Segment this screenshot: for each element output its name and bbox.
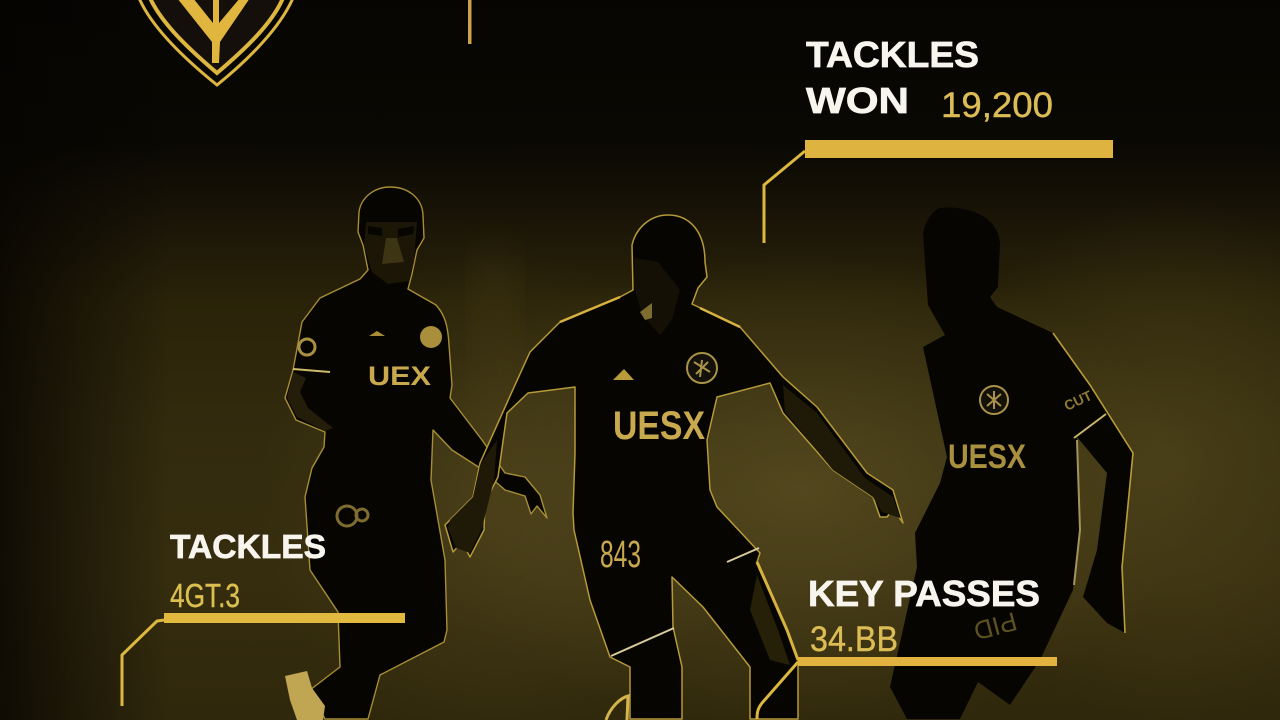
player: right footballer — [890, 207, 1133, 719]
inner arm rim: right player — [1074, 440, 1080, 585]
player: centre footballer — [445, 215, 903, 720]
label: tackles won: WON — [806, 80, 909, 121]
bar: tackles — [164, 613, 405, 623]
connector stub: top centre — [468, 0, 472, 44]
silhouette: right player — [890, 207, 1133, 719]
stat: tackles won — [764, 34, 1113, 243]
label: tackles won: TACKLES — [806, 34, 979, 75]
sleeve trim: right player — [1074, 414, 1106, 438]
shorts trim: centre player — [611, 548, 759, 656]
forearm: centre player right — [783, 385, 900, 518]
sleeve text: right player: CUT — [1062, 387, 1095, 414]
crest: right player — [980, 386, 1008, 414]
connector: tackles won — [764, 151, 805, 243]
boot trim: centre player — [606, 696, 628, 720]
shield emblem — [177, 0, 250, 63]
sleeve trim: left player — [293, 369, 330, 372]
sponsor: left player: UEX — [368, 361, 431, 391]
shorts number: right player: PID — [971, 606, 1020, 646]
shoulder highlight: centre player — [560, 297, 740, 327]
logo: gold shield crest — [139, 0, 293, 85]
value: 19,200: 19,200 — [941, 86, 1053, 125]
forearm: left player — [287, 372, 333, 431]
arm badge: left player — [299, 339, 315, 355]
bar: key passes — [798, 657, 1057, 666]
shirt mark: centre player — [613, 369, 634, 380]
sponsor: right player: UESX — [948, 438, 1026, 476]
crest: centre player — [687, 353, 717, 383]
label: key passes: KEY PASSES — [808, 573, 1040, 614]
bar: tackles won — [805, 140, 1113, 158]
player: left footballer — [285, 187, 547, 720]
boot: left player — [285, 671, 325, 720]
value: 34.BB: 34.BB — [810, 620, 898, 659]
rim light: right player — [1053, 333, 1133, 633]
shirt mark: left player — [369, 331, 385, 336]
crest: left player — [420, 326, 442, 348]
thigh rim: centre player — [757, 562, 798, 660]
sponsor: centre player: UESX — [613, 404, 705, 448]
forearm: centre player — [448, 440, 497, 553]
value: 4GT.3: 4GT.3 — [170, 577, 240, 614]
shorts number: centre player: 843 — [600, 534, 641, 576]
stat: key passes — [757, 573, 1057, 719]
silhouette: centre player — [445, 215, 903, 719]
connector: key passes — [757, 662, 798, 719]
face: left player — [364, 222, 417, 284]
stat: tackles — [122, 528, 405, 706]
connector: tackles — [122, 620, 164, 706]
shield outer outline — [139, 0, 293, 85]
face: centre player — [634, 258, 680, 335]
silhouette: left player — [285, 187, 547, 719]
shorts crest: left player — [337, 506, 357, 526]
shield inner outline — [150, 0, 283, 73]
label: tackles: TACKLES — [170, 528, 326, 565]
